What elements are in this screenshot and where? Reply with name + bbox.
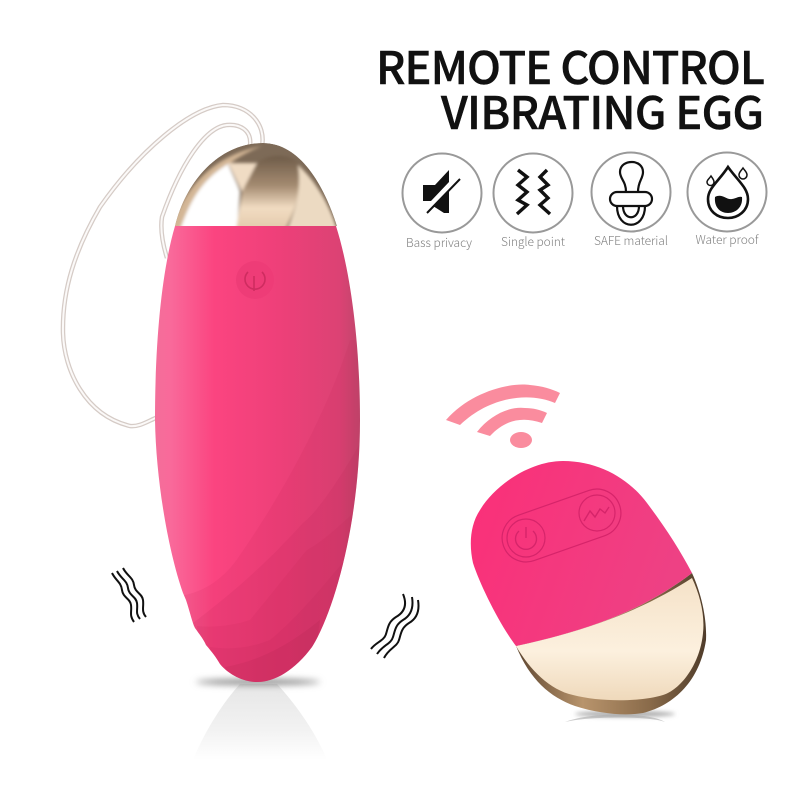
cable [63,105,263,426]
title [376,32,765,142]
egg shadow and reflection [193,679,327,760]
remote pink body [471,461,692,646]
remote control [471,461,706,722]
label: water proof: Water proof [696,231,759,248]
icon: water proof [688,152,766,248]
title: REMOTE CONTROL [376,32,765,97]
title: VIBRATING EGG [440,77,764,142]
label: safe material: SAFE material [594,232,668,249]
label: bass privacy: Bass privacy [406,234,472,251]
remote gold base [516,573,706,714]
egg gold cap [170,143,337,230]
icon: bass privacy [402,154,482,251]
egg power button [236,261,274,299]
icon: single point [494,154,572,250]
egg product [150,143,370,690]
icon: safe material [592,152,670,249]
vibration marks right [371,594,419,658]
remote shadow and reflection [565,711,675,722]
icon: wireless signal [446,384,560,448]
egg pink body [150,224,370,690]
vibration marks left [112,568,146,622]
remote buttons [496,482,627,569]
label: single point: Single point [501,233,566,250]
swirl panels [184,596,198,632]
